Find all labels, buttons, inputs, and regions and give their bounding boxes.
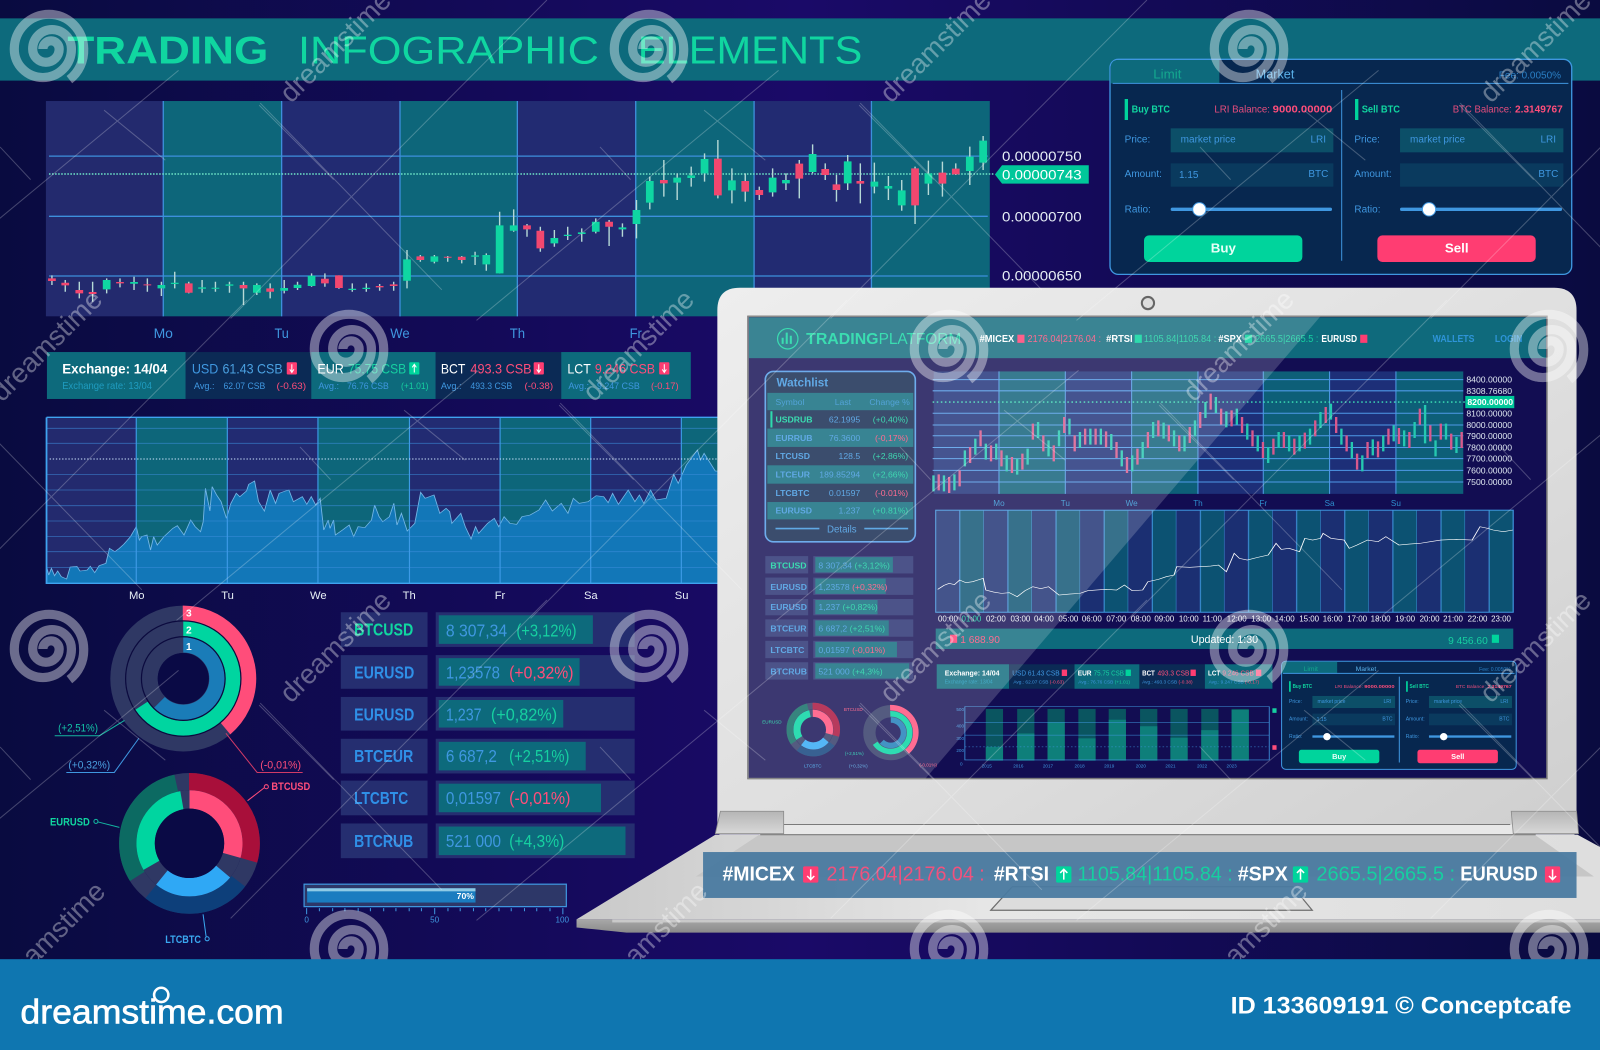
screen candlestick chart: 7800.00000 — [1466, 443, 1512, 453]
screen order panel: Ratio: — [1289, 734, 1302, 740]
order panel: Price: — [1354, 135, 1380, 146]
rates list — [341, 612, 635, 858]
area chart — [47, 417, 744, 583]
screen rates list: BTCEUR — [770, 624, 807, 634]
screen candlestick chart: Sa — [1325, 499, 1335, 508]
screen hourly line chart: 22:00 — [1468, 614, 1488, 623]
screen candlestick chart: 7700.00000 — [1466, 454, 1512, 464]
screen order panel: Limit — [1304, 666, 1318, 673]
screen header: 1105.84|1105.84 : — [1144, 334, 1216, 345]
footer: ID 133609191 © Conceptcafe — [1231, 992, 1571, 1019]
progress bar: 70% — [457, 891, 474, 901]
order panel: 1.15 — [1179, 170, 1199, 181]
screen order panel: market price — [1318, 699, 1346, 705]
watchlist: Details — [827, 525, 857, 536]
screen order panel: Fee: 0.0050% — [1479, 667, 1511, 673]
screen order panel: LRI — [1383, 699, 1391, 705]
order panel: Market — [1256, 67, 1295, 81]
donut chart: three rings — [118, 608, 249, 744]
screen order panel: BTC — [1382, 716, 1393, 722]
screen donut charts: EURUSD — [762, 719, 782, 724]
price axis labels: 0.00000700 — [1002, 209, 1082, 225]
screen candlestick chart: 8308.76680 — [1466, 386, 1512, 396]
screen header: 2176.04|2176.04 : — [1028, 334, 1101, 345]
rates list: BTCRUB — [354, 831, 413, 851]
screen exchange bar: Avg.: 9.247 CSB (-0.17) — [1209, 679, 1260, 685]
laptop ticker: EURUSD — [1460, 864, 1538, 886]
watermark text: dreamstime — [1473, 585, 1597, 708]
screen candlestick chart: Th — [1193, 499, 1203, 508]
updated bar: Updated: 1:30 — [1191, 634, 1258, 646]
screen bar chart: 500 — [956, 707, 964, 712]
area series — [47, 450, 744, 583]
order panel: LRI — [1540, 135, 1556, 146]
laptop lid — [717, 288, 1577, 824]
screen hourly line chart: 07:00 — [1106, 614, 1127, 623]
exchange bar: LCT — [567, 361, 591, 377]
order panel: BTC — [1538, 169, 1558, 180]
screen candlestick chart: 8200.00000 — [1467, 397, 1513, 407]
exchange bar: 9.246 CSB — [595, 361, 655, 377]
screen rates list: 1,23578 (+0,32%) — [818, 582, 888, 592]
screen order panel: Amount: — [1406, 716, 1425, 722]
screen hourly line chart: 12:00 — [1227, 614, 1247, 623]
donut chart: segmented: EURUSD — [50, 817, 90, 829]
donut chart: segmented — [50, 781, 310, 946]
screen header: #RTSI — [1106, 334, 1133, 345]
order panel: LRI — [1310, 135, 1326, 146]
screen exchange bar: 493.3 CSB — [1158, 668, 1189, 677]
area chart day labels: Sa — [584, 590, 598, 602]
updated bar: 9 456.60 — [1448, 636, 1488, 647]
screen exchange bar: Avg.: 62.07 CSB (-0.63) — [1013, 679, 1064, 685]
screen candlestick chart: Mo — [993, 499, 1005, 508]
screen candlestick chart: 8400.00000 — [1466, 375, 1512, 385]
donut chart: segmented: BTCUSD — [271, 781, 310, 793]
screen rates list: EURUSD — [770, 582, 807, 592]
donut callouts: (+2,51%) — [58, 723, 98, 735]
screen header: LOGIN — [1495, 334, 1522, 345]
watermark text: dreamstime — [590, 875, 713, 999]
price axis labels: 0.00000650 — [1002, 269, 1082, 285]
progress bar: 0 — [304, 915, 309, 924]
exchange bar: EUR — [317, 361, 344, 377]
screen header: #MICEX — [980, 334, 1015, 345]
progress bar: 50 — [430, 915, 440, 924]
current price tag: 0.00000743 — [1002, 168, 1082, 184]
screen hourly line chart: 15:00 — [1299, 614, 1320, 623]
exchange bar: BCT — [441, 361, 466, 377]
title: INFOGRAPHIC — [298, 29, 599, 72]
order panel: LRI Balance: — [1214, 105, 1270, 116]
footer: dreamstime.com — [20, 993, 284, 1031]
rates list: LTCBTC — [354, 788, 409, 808]
screen bar chart: 2016 — [1013, 763, 1024, 768]
exchange bar: Avg.: — [441, 381, 462, 391]
screen order panel: 1.15 — [1317, 717, 1327, 723]
watchlist: 1.237 — [839, 505, 860, 515]
area chart day labels: Mo — [129, 590, 145, 602]
rates list: 1,23578 — [446, 663, 500, 683]
screen donut charts: (+2,51%) — [845, 751, 864, 756]
watchlist: (+2,86%) — [873, 451, 908, 461]
order panel: Buy BTC — [1132, 105, 1170, 116]
screen header: EURUSD — [1321, 334, 1357, 345]
screen bar chart — [956, 707, 1277, 768]
screen order panel: Market — [1356, 666, 1376, 673]
laptop ticker: 2665.5|2665.5 : — [1316, 864, 1455, 886]
rates list: BTCEUR — [354, 746, 414, 766]
screen rates list: LTCBTC — [770, 645, 805, 655]
watchlist: Change % — [869, 397, 910, 407]
footer — [0, 959, 1600, 1050]
screen hourly line chart: 17:00 — [1347, 614, 1368, 623]
laptop ticker: 2176.04|2176.04 : — [827, 864, 985, 886]
laptop ticker: #MICEX — [722, 864, 795, 886]
price axis labels: 0.00000750 — [1002, 149, 1082, 165]
rates list: (+3,12%) — [516, 621, 577, 641]
screen order panel: Buy — [1332, 752, 1347, 761]
rates list: (+4,3%) — [509, 831, 564, 851]
camera — [1142, 297, 1154, 309]
exchange bar: 75.75 CSB — [348, 361, 406, 377]
screen hourly line chart — [936, 510, 1513, 623]
screen rates list: 6 687,2 (+2,51%) — [818, 624, 885, 634]
screen hourly line chart: 05:00 — [1058, 614, 1079, 623]
laptop — [577, 288, 1600, 933]
watermark text: dreamstime — [1176, 283, 1300, 407]
screen hourly line chart: 08:00 — [1131, 614, 1151, 623]
watchlist: 128.5 — [839, 451, 860, 461]
screen order panel: Amount: — [1289, 716, 1308, 722]
donut callouts — [55, 720, 303, 772]
screen exchange bar: Avg.: 76.76 CSB (+1.01) — [1078, 679, 1130, 685]
watchlist: 62.1995 — [829, 414, 860, 424]
price axis labels — [995, 149, 1089, 285]
donut chart: three rings: 2 — [186, 626, 192, 637]
watermark text: dreamstime — [873, 585, 997, 708]
area chart day labels: We — [310, 590, 327, 602]
screen hourly line chart: 03:00 — [1010, 614, 1031, 623]
rates list: 0,01597 — [446, 788, 501, 808]
updated bar: 1 688.90 — [960, 635, 1000, 646]
watermark text: dreamstime — [273, 585, 397, 708]
exchange bar: USD — [192, 361, 218, 377]
title — [67, 29, 862, 72]
screen bar chart: 400 — [956, 724, 964, 729]
title band — [0, 18, 1600, 81]
screen candlestick chart: 7600.00000 — [1466, 465, 1512, 475]
exchange bar: Avg.: — [318, 381, 339, 391]
screen exchange bar: 75.75 CSB — [1094, 668, 1124, 677]
screen bar chart: 200 — [956, 748, 964, 753]
screen reflection — [748, 316, 1320, 779]
exchange bar: (-0.17) — [651, 381, 679, 391]
rates list: BTCUSD — [354, 620, 413, 640]
screen order panel — [1282, 661, 1516, 769]
exchange bar: 62.07 CSB — [223, 381, 265, 391]
screen hourly line chart: 09:00 — [1154, 614, 1175, 623]
rates list: 6 687,2 — [446, 746, 497, 766]
title: TRADING — [67, 29, 268, 72]
order panel: BTC — [1308, 169, 1328, 180]
watchlist: 0.01597 — [829, 488, 860, 498]
exchange bar: Avg.: — [194, 381, 215, 391]
area chart day labels: Th — [403, 590, 416, 602]
order panel: Sell BTC — [1362, 105, 1400, 116]
screen header: 2665.5|2665.5 : — [1255, 334, 1318, 345]
screen hourly line chart: 14:00 — [1275, 614, 1295, 623]
screen exchange bar: Exchange: 14/04 — [945, 668, 1000, 677]
order panel: Limit — [1153, 66, 1182, 81]
order panel: Fee: 0.0050% — [1499, 70, 1561, 81]
area chart day labels: Su — [675, 590, 688, 602]
screen donut charts: LTCBTC — [804, 763, 822, 768]
screen hourly line chart: 13:00 — [1251, 614, 1272, 623]
exchange bar: (-0.38) — [524, 381, 553, 391]
screen candlestick chart: 8000.00000 — [1466, 420, 1512, 430]
progress bar: 100 — [555, 915, 570, 924]
donut callouts: (-0,01%) — [260, 759, 301, 771]
screen candlestick chart: 7500.00000 — [1466, 477, 1512, 487]
screen exchange bar: 9.246 CSB — [1222, 668, 1254, 677]
screen exchange bar: USD 61.43 CSB — [1012, 668, 1060, 677]
watchlist: LTCBTC — [776, 488, 810, 498]
screen order panel: 9000.00000 — [1364, 684, 1395, 690]
screen donut charts: (-0,01%) — [919, 762, 937, 767]
exchange bar — [47, 352, 691, 399]
watermark text: dreamstime — [576, 283, 700, 407]
order panel: Amount: — [1354, 169, 1392, 180]
order panel: Buy — [1211, 241, 1237, 256]
order panel: Ratio: — [1125, 204, 1151, 215]
watchlist: (-0.01%) — [875, 488, 908, 498]
screen bar chart: 2019 — [1104, 763, 1115, 768]
screen — [748, 316, 1547, 779]
candlesticks — [52, 136, 983, 305]
exchange bar: 493.3 CSB — [470, 381, 512, 391]
rates list: 8 307,34 — [446, 621, 507, 641]
screen candlestick chart — [933, 371, 1514, 508]
screen rates list: 8 307,34 (+3,12%) — [818, 560, 890, 570]
screen bar chart: 0 — [960, 761, 963, 766]
exchange bar: 76.76 CSB — [347, 381, 389, 391]
screen bar chart: 2021 — [1165, 763, 1176, 768]
order panel: market price — [1181, 135, 1236, 146]
screen hourly line chart: 06:00 — [1082, 614, 1102, 623]
screen hourly line chart: 16:00 — [1323, 614, 1343, 623]
screen order panel: LRI Balance: — [1335, 684, 1363, 690]
watermark text: dreamstime — [1190, 875, 1313, 999]
order panel: 2.3149767 — [1515, 105, 1563, 116]
area chart day labels — [129, 590, 688, 602]
day labels for candlestick chart: Tu — [274, 326, 289, 342]
exchange bar: 61.43 CSB — [222, 361, 283, 377]
donut chart: three rings: 3 — [186, 608, 192, 619]
laptop ticker: 1105.84|1105.84 : — [1078, 864, 1233, 886]
screen donut charts: (+0,32%) — [849, 763, 868, 768]
order panel: Sell — [1445, 241, 1469, 256]
laptop ticker: #SPX — [1238, 864, 1288, 886]
screen order panel: BTC Balance: — [1456, 684, 1486, 690]
screen hourly line chart: 00:00 — [938, 614, 958, 623]
exchange bar: Avg.: — [568, 381, 589, 391]
screen header: TRADING — [806, 331, 879, 348]
order panel: Price: — [1125, 135, 1150, 146]
area chart day labels: Fr — [495, 590, 506, 602]
watchlist: EURRUB — [776, 433, 813, 443]
watchlist: (+0,40%) — [873, 414, 908, 424]
screen hourly line chart: 23:00 — [1491, 614, 1512, 623]
watchlist: 76.3600 — [829, 433, 860, 443]
screen order panel: Sell BTC — [1409, 684, 1429, 690]
screen candlestick chart: Su — [1391, 499, 1401, 508]
watchlist: 189.85294 — [819, 470, 860, 480]
screen bar chart: 300 — [956, 736, 964, 741]
laptop ticker: #RTSI — [994, 864, 1049, 886]
screen bar chart: 2015 — [982, 763, 992, 768]
screen bar chart: 2018 — [1074, 763, 1085, 768]
screen order panel: Sell — [1451, 752, 1464, 761]
exchange bar: Exchange rate: 13/04 — [62, 381, 153, 392]
screen exchange bar: EUR — [1078, 668, 1092, 677]
screen order panel: Ratio: — [1406, 734, 1419, 740]
screen bar chart: 2022 — [1197, 763, 1208, 768]
rates list: (-0,01%) — [509, 788, 570, 808]
screen hourly line chart: 11:00 — [1203, 614, 1222, 623]
screen donut charts — [762, 706, 937, 768]
screen order panel: Price: — [1289, 699, 1302, 705]
rates list: (+2,51%) — [509, 746, 569, 766]
screen bar chart: 2023 — [1227, 763, 1237, 768]
donut callouts: (+0,32%) — [68, 759, 110, 771]
day labels for candlestick chart: Th — [510, 326, 525, 342]
day labels for candlestick chart: Fr — [630, 326, 642, 342]
exchange bar: (-0.63) — [277, 381, 306, 391]
screen rates list: 1,237 (+0,82%) — [818, 602, 878, 612]
screen order panel: Buy BTC — [1293, 684, 1312, 690]
laptop ticker — [703, 852, 1577, 898]
order panel: 9000.00000 — [1273, 105, 1332, 116]
title: ELEMENTS — [638, 29, 862, 72]
screen order panel: market price — [1434, 699, 1462, 705]
order panel: Amount: — [1125, 169, 1162, 180]
exchange bar: Exchange: 14/04 — [62, 361, 167, 377]
area chart day labels: Tu — [221, 590, 234, 602]
rates list: 1,237 — [446, 704, 482, 724]
screen exchange bar: Exchange rate: 13/04 — [945, 679, 993, 685]
watchlist: (+2,66%) — [873, 470, 908, 480]
screen hourly line chart: 19:00 — [1395, 614, 1416, 623]
screen exchange bar: LCT — [1208, 668, 1221, 677]
laptop base — [577, 835, 1600, 933]
candlestick chart panel — [46, 101, 995, 316]
screen bar chart: 2020 — [1136, 763, 1146, 768]
watchlist: Watchlist — [777, 377, 828, 390]
screen candlestick chart: 8100.00000 — [1466, 408, 1512, 418]
watchlist: Symbol — [776, 397, 804, 407]
watchlist — [765, 371, 915, 542]
screen hourly line chart: 20:00 — [1420, 614, 1440, 623]
screen hourly line chart: 18:00 — [1371, 614, 1391, 623]
screen order panel: Price: — [1406, 699, 1419, 705]
screen candlestick chart: Fr — [1259, 499, 1267, 508]
screen hourly line chart: 01:00 — [961, 614, 982, 623]
screen order panel: BTC — [1499, 716, 1510, 722]
watchlist: EURUSD — [776, 505, 812, 515]
screen header: #SPX — [1218, 334, 1242, 345]
screen rates list: BTCRUB — [770, 666, 807, 676]
screen donut charts: BTCUSD — [844, 707, 863, 712]
screen rates list — [765, 556, 913, 680]
order panel: BTC Balance: — [1453, 105, 1512, 116]
day labels for candlestick chart — [154, 326, 642, 342]
rates list: 521 000 — [446, 831, 501, 851]
screen hourly line chart: 02:00 — [986, 614, 1006, 623]
rates list: (+0,32%) — [509, 663, 573, 683]
watchlist: LTCUSD — [776, 451, 810, 461]
screen order panel: 2.3149767 — [1487, 684, 1512, 690]
screen exchange bar — [937, 664, 1272, 689]
screen candlestick chart: We — [1126, 499, 1138, 508]
screen rates list: 0,01597 (-0,01%) — [818, 645, 885, 655]
watchlist: Last — [835, 397, 852, 407]
screen rates list: BTCUSD — [770, 560, 806, 570]
screen exchange bar: Avg.: 493.3 CSB (-0.38) — [1142, 679, 1193, 685]
donut chart: three rings: 1 — [186, 642, 192, 653]
screen candlestick chart: 7900.00000 — [1466, 431, 1512, 441]
screen rates list: EURUSD — [770, 602, 807, 612]
exchange bar: 9.247 CSB — [597, 381, 640, 391]
day labels for candlestick chart: Mo — [154, 326, 173, 342]
order panel — [1110, 59, 1572, 274]
screen hourly line chart: 04:00 — [1034, 614, 1054, 623]
order panel: Ratio: — [1354, 204, 1380, 215]
exchange bar: (+1.01) — [401, 381, 429, 391]
watchlist: (+0.81%) — [873, 505, 908, 515]
screen header: WALLETS — [1433, 334, 1475, 345]
screen order panel: LRI — [1500, 699, 1508, 705]
screen header — [749, 317, 1546, 358]
hinges — [715, 811, 1579, 834]
progress bar — [304, 884, 570, 924]
screen candlestick chart: Tu — [1061, 499, 1070, 508]
updated bar — [936, 629, 1513, 649]
screen hourly line chart: 10:00 — [1179, 614, 1199, 623]
screen rates list: 521 000 (+4,3%) — [818, 666, 883, 676]
screen bar chart: 2017 — [1043, 763, 1054, 768]
watchlist: (-0,17%) — [875, 433, 908, 443]
watchlist: USDRUB — [776, 414, 813, 424]
day labels for candlestick chart: We — [390, 326, 410, 342]
screen exchange bar: BCT — [1142, 668, 1155, 677]
donut chart: segmented: LTCBTC — [165, 934, 201, 946]
rates list: EURUSD — [354, 663, 414, 683]
exchange bar: 493.3 CSB — [470, 361, 532, 377]
screen hourly line chart: 21:00 — [1443, 614, 1464, 623]
rates list: EURUSD — [354, 704, 414, 724]
rates list: (+0,82%) — [491, 704, 557, 724]
order panel: market price — [1410, 135, 1465, 146]
screen header: PLATFORM — [879, 331, 961, 348]
watchlist: LTCEUR — [776, 470, 811, 480]
